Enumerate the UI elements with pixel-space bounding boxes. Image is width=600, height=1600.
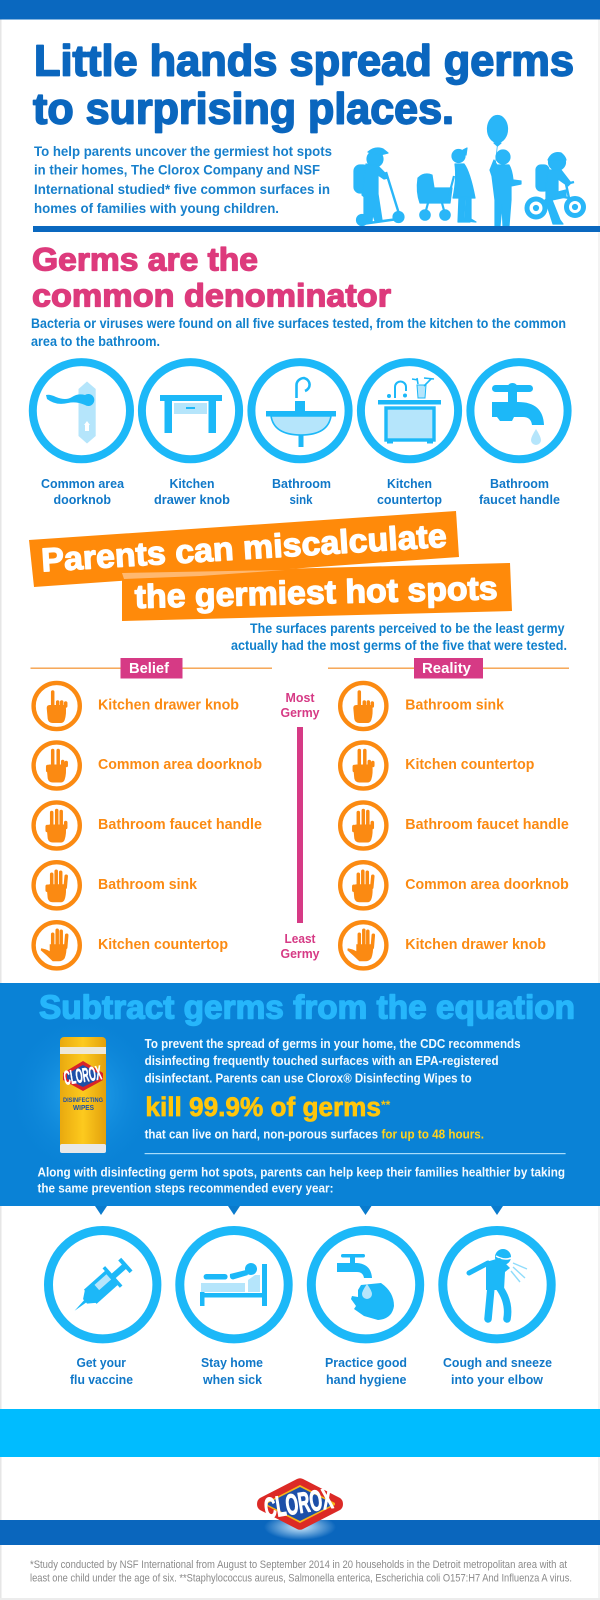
text: surfaces parents perceived xyxy=(231,621,567,653)
surface labels: sink xyxy=(290,493,313,507)
paragraph: bacteria or viruses xyxy=(31,316,566,349)
text: surfaces parents perceived: actually had the most germs of the five that were tested. xyxy=(231,638,567,653)
row: kitchen drawer knob xyxy=(340,922,546,968)
illustration: children silhouettes xyxy=(354,116,584,227)
heading: germs are the common denominator: common denominator xyxy=(32,278,391,314)
cyan band xyxy=(0,1409,600,1457)
scale: most to least germy: Most xyxy=(286,690,315,705)
step labels: Cough and sneeze xyxy=(443,1355,552,1370)
child on scooter xyxy=(354,148,404,226)
surface labels: drawer knob xyxy=(154,493,230,507)
step labels: Practice good xyxy=(325,1355,407,1370)
body text: disinfectant. Parents can use Clorox® Disinfecting Wipes to xyxy=(145,1071,472,1086)
top banner bar xyxy=(0,0,600,20)
heading: germs are the common denominator: Germs are the xyxy=(32,242,258,278)
row: kitchen drawer knob: Kitchen drawer knob xyxy=(405,937,546,953)
step labels xyxy=(70,1355,552,1387)
step labels: into your elbow xyxy=(451,1372,543,1387)
row: bathroom faucet handle xyxy=(340,802,569,849)
orange banner: parents can miscalculate: the germiest hot spots xyxy=(134,569,498,615)
surface labels: doorknob xyxy=(54,493,111,507)
step labels: Stay home xyxy=(201,1355,263,1370)
body text: To prevent the spread of germs in your home, the CDC recommends xyxy=(145,1036,521,1051)
icon: hand washing xyxy=(311,1230,420,1339)
row: kitchen drawer knob xyxy=(34,683,239,729)
column header: reality: Reality xyxy=(422,661,471,677)
logo: Clorox xyxy=(257,1478,343,1540)
step labels: flu vaccine xyxy=(70,1372,133,1387)
row: bathroom faucet handle xyxy=(34,802,262,849)
product: disinfecting wipes canister: DISINFECTING xyxy=(63,1097,103,1104)
row: kitchen countertop xyxy=(340,742,534,789)
row: kitchen countertop xyxy=(34,922,228,968)
row: bathroom sink: Bathroom sink xyxy=(98,877,198,893)
panel: reality ranking xyxy=(340,683,569,968)
text: along with disinfecting xyxy=(38,1165,565,1196)
intro text: International studied* five common surfaces in xyxy=(34,182,330,198)
icon: doorknob xyxy=(33,362,130,459)
product: disinfecting wipes canister: WIPES xyxy=(73,1105,94,1112)
surface labels: countertop xyxy=(377,493,442,507)
child on balance bike xyxy=(527,153,584,224)
text: hard non-porous surfaces: for up to 48 hours. xyxy=(382,1127,484,1142)
icon: cough into elbow xyxy=(443,1230,551,1339)
text: hard non-porous surfaces: that can live on hard, non-porous surfaces xyxy=(145,1127,378,1142)
body text xyxy=(145,1036,521,1086)
icon: flu vaccine syringe xyxy=(48,1230,157,1339)
intro text: To help parents uncover the germiest hot spots xyxy=(34,144,332,160)
child with stroller xyxy=(417,148,476,222)
row: bathroom faucet handle: Bathroom faucet handle xyxy=(405,817,569,833)
text: along with disinfecting: the same prevention steps recommended every year: xyxy=(38,1181,334,1196)
text: surfaces parents perceived: The surfaces parents perceived to be the least germy xyxy=(250,621,565,636)
divider bar under intro xyxy=(33,226,600,232)
row: kitchen countertop: Kitchen countertop xyxy=(405,757,534,773)
surface labels: Kitchen xyxy=(170,477,214,491)
row: bathroom sink: Bathroom sink xyxy=(405,698,505,714)
row: bathroom faucet handle: Bathroom faucet handle xyxy=(98,817,262,833)
icon: bathroom sink xyxy=(251,362,349,459)
column header: belief: Belief xyxy=(129,661,169,677)
title: to surprising places. xyxy=(33,84,454,134)
surface labels: faucet handle xyxy=(479,493,560,507)
surface labels: Kitchen xyxy=(387,477,432,491)
body text: disinfecting frequently touched surfaces with an EPA-registered xyxy=(145,1053,499,1068)
paragraph: bacteria or viruses: area to the bathroom. xyxy=(31,334,160,349)
scale: most to least germy xyxy=(280,690,320,961)
orange banner: parents can miscalculate xyxy=(29,511,512,621)
title xyxy=(33,36,574,134)
icon: bathroom faucet xyxy=(470,362,568,459)
column header: belief xyxy=(30,658,272,678)
row: common area doorknob: Common area doorknob xyxy=(405,877,569,893)
panel: five surfaces xyxy=(33,362,568,507)
scale: most to least germy: Germy xyxy=(280,946,320,961)
surface labels: Bathroom xyxy=(272,477,331,491)
scale: most to least germy: Least xyxy=(284,931,316,946)
intro text xyxy=(34,144,332,217)
heading: subtract germs from the equation: Subtract germs from the equation xyxy=(39,988,575,1026)
balloon and child xyxy=(488,116,521,227)
surface labels xyxy=(41,477,560,507)
blue footer band xyxy=(0,1520,600,1545)
row: common area doorknob: Common area doorknob xyxy=(98,757,262,773)
surface labels: Common area xyxy=(41,477,125,491)
row: common area doorknob xyxy=(340,862,569,908)
icon: kitchen countertop xyxy=(361,362,458,459)
row: bathroom sink xyxy=(340,683,505,729)
footnote xyxy=(30,1559,572,1585)
step labels: when sick xyxy=(202,1372,263,1387)
column header: reality xyxy=(328,658,569,678)
product: disinfecting wipes canister xyxy=(60,1037,106,1153)
surface labels: Bathroom xyxy=(490,477,549,491)
intro text: homes of families with young children. xyxy=(34,201,279,217)
title: Little hands spread germs xyxy=(34,36,574,86)
row: bathroom sink xyxy=(34,862,198,908)
intro text: in their homes, The Clorox Company and NSF xyxy=(34,162,320,178)
icon: kitchen drawer xyxy=(142,362,239,459)
row: kitchen countertop: Kitchen countertop xyxy=(98,937,228,953)
icon: stay home in bed xyxy=(180,1230,288,1339)
logo: Clorox: CLOROX xyxy=(262,1483,336,1525)
orange banner: parents can miscalculate: Parents can miscalculate xyxy=(40,517,448,578)
panel: subtract germs: CLOROX xyxy=(62,1062,104,1090)
row: common area doorknob xyxy=(34,742,262,789)
panel: belief ranking xyxy=(34,683,262,968)
step labels: hand hygiene xyxy=(326,1372,406,1387)
scale: most to least germy: Germy xyxy=(280,705,320,720)
panel: prevention steps xyxy=(48,1230,552,1387)
row: kitchen drawer knob: Kitchen drawer knob xyxy=(98,698,239,714)
callout: kill 99.9 percent of germs: kill 99.9% of germs xyxy=(145,1092,381,1122)
panel: subtract germs xyxy=(0,983,600,1215)
step labels: Get your xyxy=(76,1355,126,1370)
callout: kill 99.9 percent of germs: ** xyxy=(381,1098,391,1112)
heading: germs are the common denominator xyxy=(32,242,391,314)
